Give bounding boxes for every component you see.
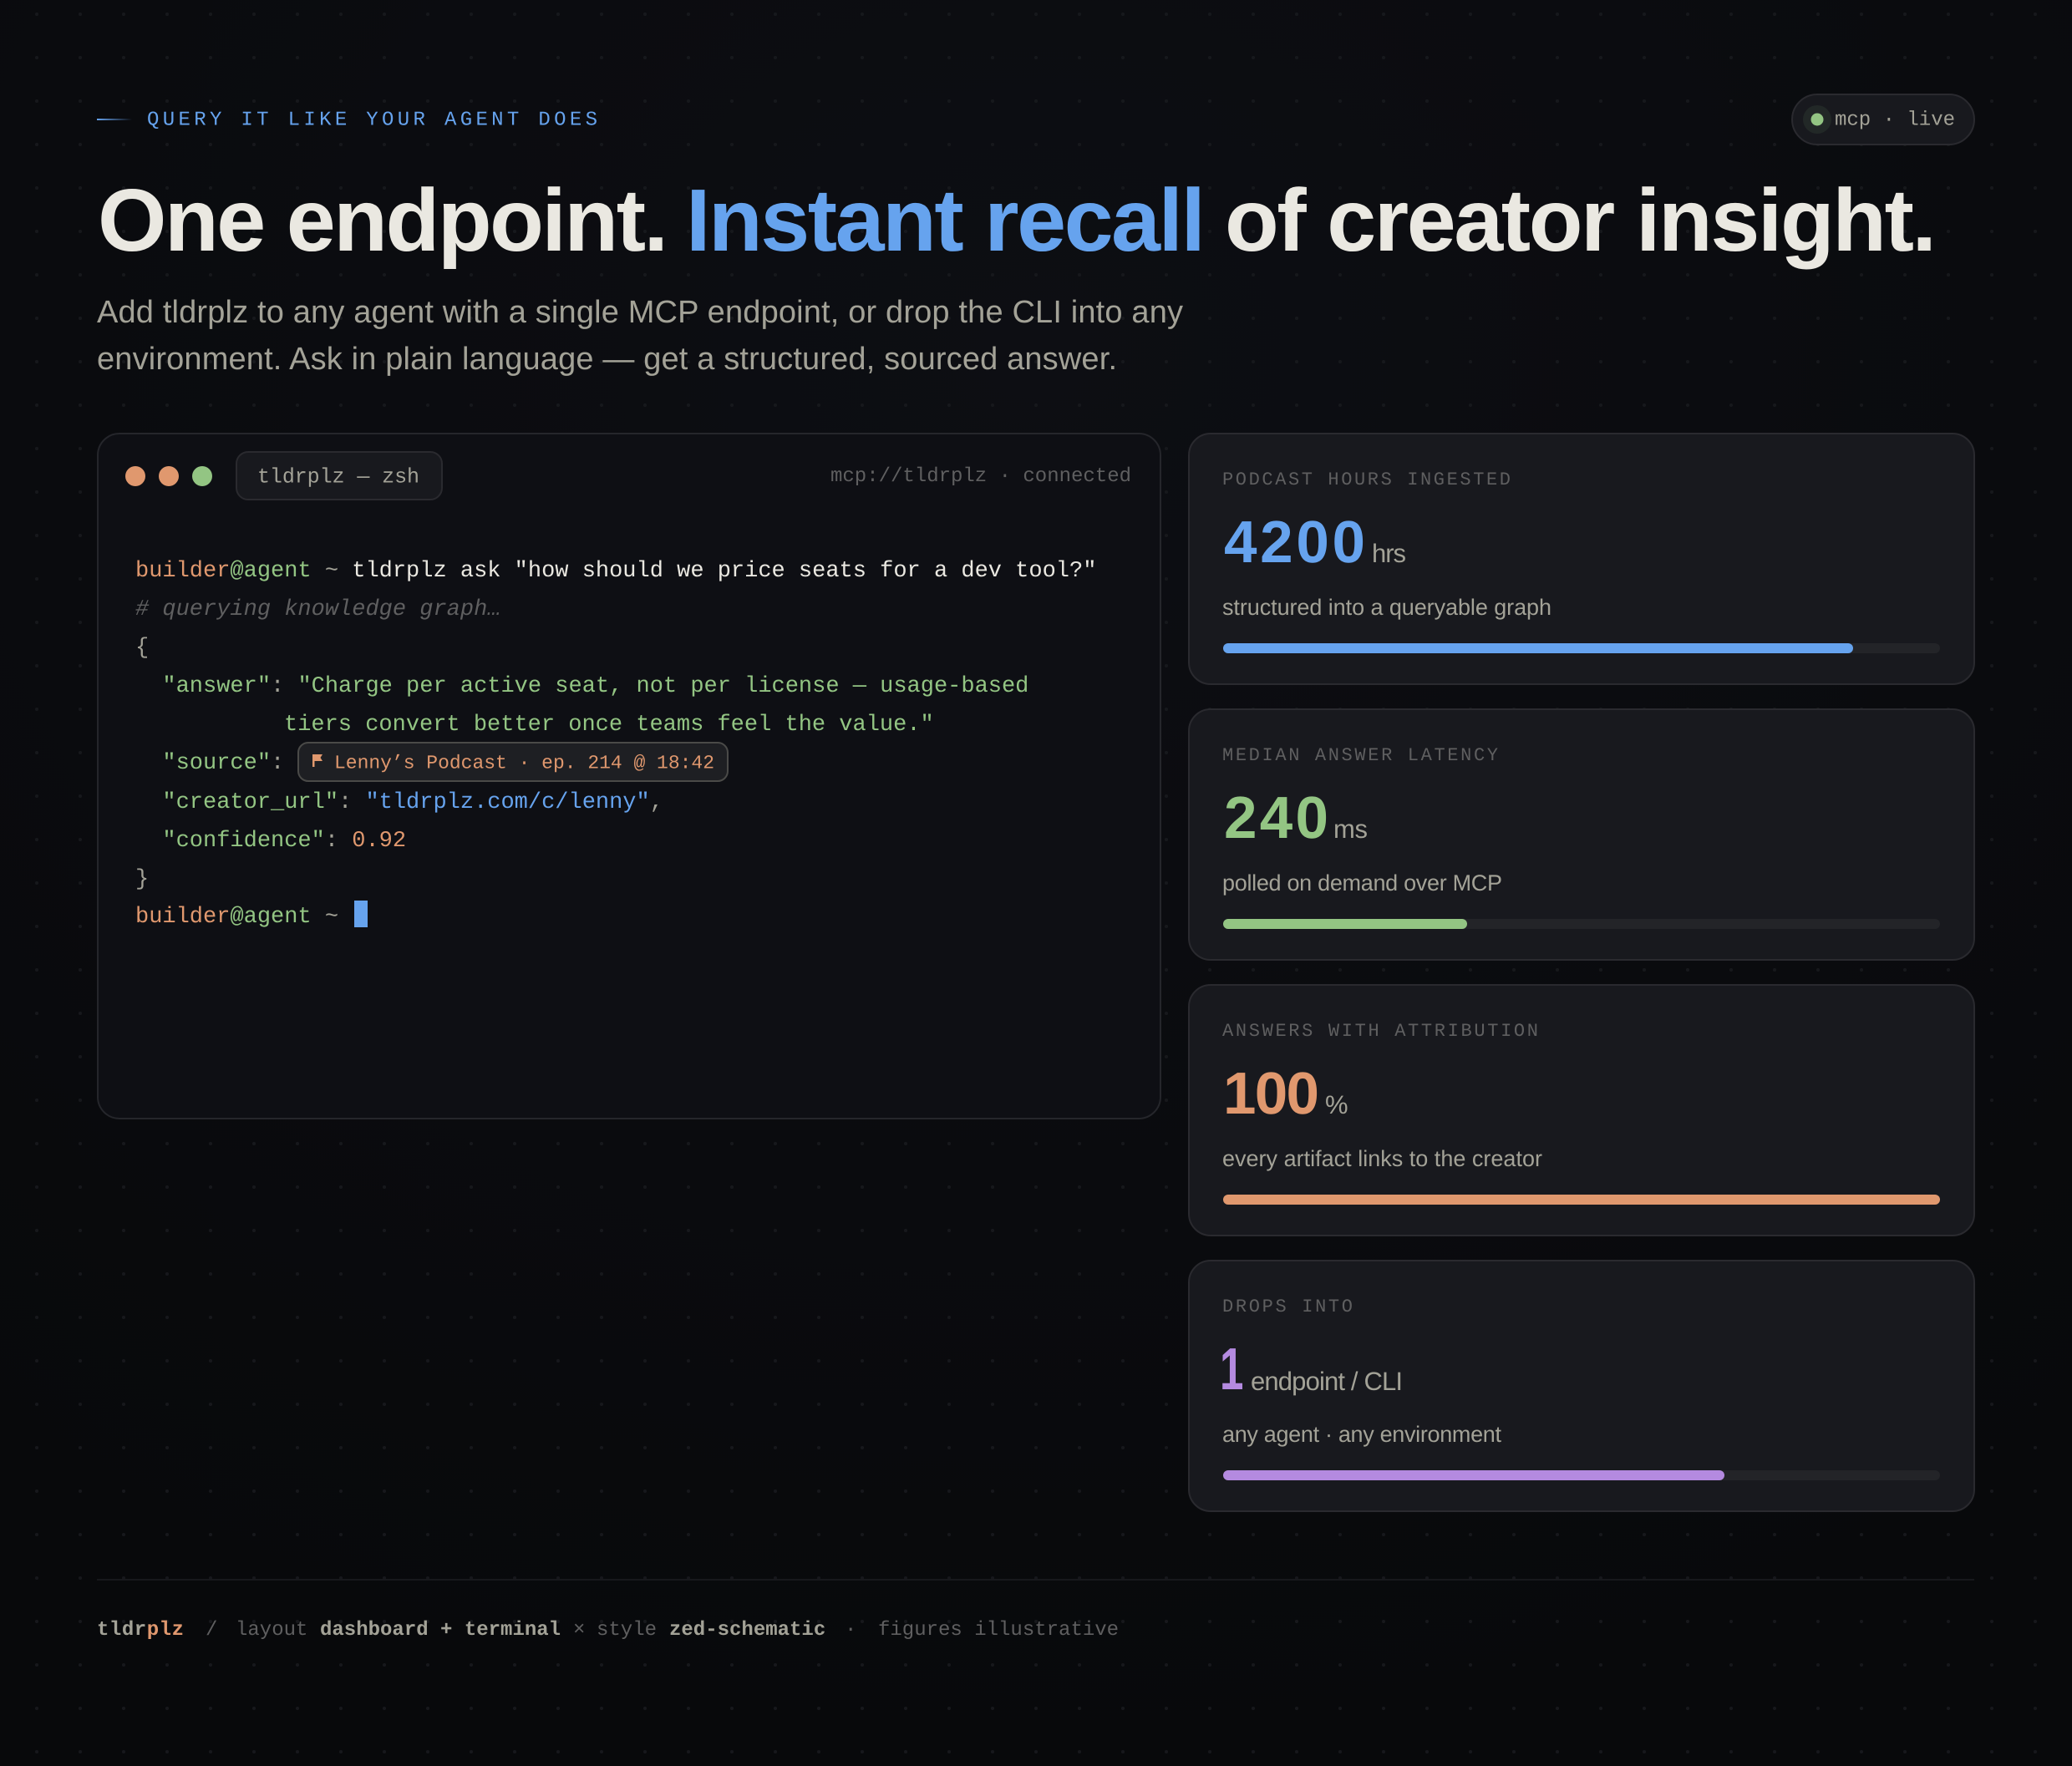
stat card: podcast hours: structured into a queryable graph	[1222, 595, 1551, 620]
stat card: latency: polled on demand over MCP	[1222, 870, 1502, 896]
terminal output: tiers convert better once teams feel the value."	[284, 713, 934, 738]
footer: /	[206, 1619, 217, 1642]
stat card: attribution: every artifact links to the creator	[1222, 1146, 1542, 1171]
terminal output: "confidence": 0.92	[135, 829, 406, 854]
stat card: attribution: %	[1325, 1090, 1348, 1119]
terminal output: # querying knowledge graph…	[135, 597, 500, 622]
subtitle: environment. Ask in plain language — get a structured, sourced answer.	[97, 342, 1117, 377]
terminal output: }	[135, 867, 149, 892]
terminal output: builder@agent ~ tldrplz ask "how should we price seats for a dev tool?"	[135, 559, 1096, 584]
footer: ×	[573, 1619, 585, 1642]
progress bar	[1223, 1470, 1940, 1480]
footer	[97, 1619, 1119, 1642]
terminal tab: tldrplz — zsh	[257, 464, 419, 490]
status pill: mcp live: mcp · live	[1835, 109, 1955, 132]
subtitle	[97, 295, 1183, 377]
terminal window dots	[125, 466, 212, 486]
terminal output: builder@agent ~	[135, 905, 338, 930]
stat card: attribution	[1189, 985, 1974, 1236]
title: of creator insight.	[1225, 171, 1937, 270]
stat card: podcast hours: PODCAST HOURS INGESTED	[1222, 469, 1511, 490]
footer: zed-schematic	[669, 1619, 825, 1642]
title: One endpoint.	[98, 171, 668, 270]
progress bar	[1223, 919, 1940, 929]
terminal tab	[236, 452, 442, 500]
terminal output: {	[135, 636, 149, 661]
stat card: latency: ms	[1333, 814, 1368, 844]
footer: figures illustrative	[878, 1619, 1119, 1642]
footer: ·	[845, 1619, 856, 1642]
footer: style	[597, 1619, 657, 1642]
status pill: mcp live	[1792, 94, 1974, 145]
stat card: drops into: 1	[1220, 1337, 1243, 1403]
terminal output: "source":	[135, 751, 284, 776]
title: Instant recall	[686, 171, 1206, 270]
connection status: mcp://tldrplz · connected	[830, 465, 1131, 488]
terminal output: "creator_url": "tldrplz.com/c/lenny",	[135, 790, 663, 815]
cursor	[354, 901, 368, 927]
stat card: podcast hours	[1189, 434, 1974, 684]
stat card: podcast hours: hrs	[1372, 539, 1406, 568]
title	[98, 171, 1937, 270]
stat card: podcast hours: 4200	[1224, 510, 1365, 576]
stat card: drops into	[1189, 1261, 1974, 1511]
terminal output: "answer": "Charge per active seat, not per license — usage-based	[135, 674, 1028, 699]
progress bar	[1223, 1195, 1940, 1205]
footer: dashboard + terminal	[320, 1619, 561, 1642]
stat card: drops into: endpoint / CLI	[1251, 1367, 1403, 1396]
terminal output	[135, 559, 1096, 930]
progress bar	[1223, 643, 1940, 653]
stat card: attribution: 100	[1223, 1061, 1319, 1127]
stat card: attribution: ANSWERS WITH ATTRIBUTION	[1222, 1021, 1538, 1042]
stat card: latency	[1189, 709, 1974, 960]
subtitle: Add tldrplz to any agent with a single MCP endpoint, or drop the CLI into any	[97, 295, 1183, 330]
source citation chip: Lenny’s Podcast · ep. 214 @ 18:42	[334, 752, 714, 774]
stat card: latency: MEDIAN ANSWER LATENCY	[1222, 745, 1498, 766]
footer: tldrplz	[97, 1619, 184, 1642]
footer: layout	[236, 1619, 307, 1642]
source citation chip	[298, 743, 728, 781]
eyebrow: QUERY IT LIKE YOUR AGENT DOES	[147, 109, 597, 132]
stat card: drops into: DROPS INTO	[1222, 1297, 1353, 1317]
stat card: latency: 240	[1224, 785, 1328, 851]
stat card: drops into: any agent · any environment	[1222, 1422, 1501, 1447]
panel: terminal	[98, 434, 1160, 1119]
